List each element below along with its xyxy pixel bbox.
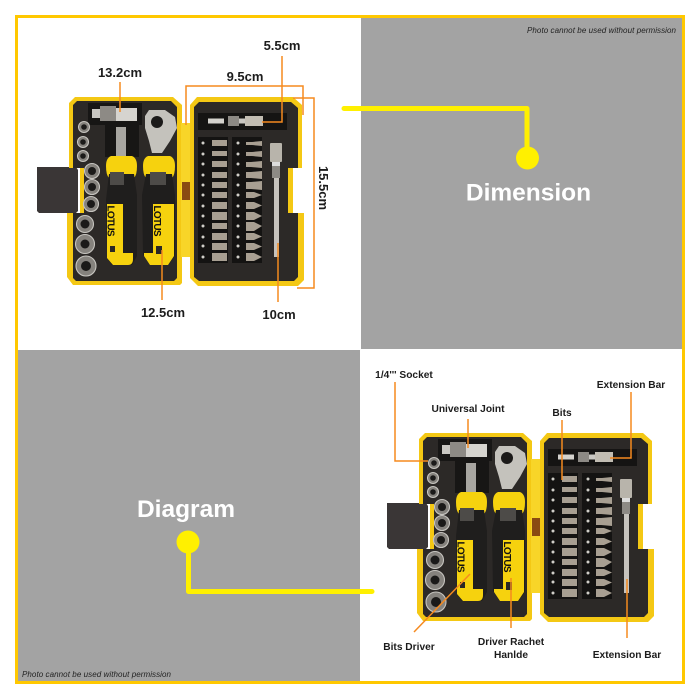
heading: Dimension: Dimension xyxy=(466,180,591,206)
panel: diagram grey background xyxy=(18,350,360,681)
leader 13.2cm xyxy=(119,82,121,112)
label handle line two: Hanlde xyxy=(494,650,528,661)
leader extension bar top xyxy=(610,392,631,458)
leader socket xyxy=(395,382,428,461)
right case xyxy=(190,97,304,286)
bits right column xyxy=(246,141,262,261)
leader extension bar bottom xyxy=(626,579,628,638)
extension bar vertical xyxy=(270,143,282,257)
left case interior xyxy=(73,101,177,281)
label bits: Bits xyxy=(552,408,572,419)
tool kit photo: dimension view xyxy=(37,97,304,286)
label 13.2cm: 13.2cm xyxy=(98,65,142,80)
hinge xyxy=(181,123,190,257)
label 15.5cm: 15.5cm xyxy=(316,166,331,210)
brand on ratchet handle, diagram: LOTUS xyxy=(501,542,512,573)
bracket 15.5cm xyxy=(293,98,314,288)
universal joint xyxy=(92,106,137,121)
brand on ratchet handle: LOTUS xyxy=(151,206,162,237)
leader bits xyxy=(561,420,563,480)
photo notice top: Photo cannot be used without permission xyxy=(527,26,677,35)
brand on driver handle: LOTUS xyxy=(104,206,116,237)
right case interior xyxy=(194,102,298,281)
leader driver ratchet handle xyxy=(510,578,512,628)
dimension annotations xyxy=(98,38,331,322)
leader 5.5cm xyxy=(262,56,282,122)
left case xyxy=(67,97,182,285)
label extension bar top: Extension Bar xyxy=(597,380,665,391)
leader 12.5cm xyxy=(161,250,163,300)
extension bar horizontal xyxy=(208,116,263,126)
diagram annotations xyxy=(375,370,665,661)
label 12.5cm: 12.5cm xyxy=(141,305,185,320)
bracket 9.5cm xyxy=(186,86,303,125)
photo notice bottom: Photo cannot be used without permission xyxy=(22,670,172,679)
dark recess xyxy=(105,125,139,157)
ratchet handle xyxy=(142,110,177,265)
leader universal joint xyxy=(467,419,469,448)
bits left column xyxy=(212,140,227,261)
label bits driver: Bits Driver xyxy=(383,642,435,653)
label driver ratchet handle: Driver Rachet xyxy=(478,637,545,648)
label 10cm: 10cm xyxy=(262,307,296,322)
flap xyxy=(37,167,78,213)
label 5.5cm: 5.5cm xyxy=(264,38,300,53)
top tray xyxy=(198,113,287,130)
label universal joint: Universal Joint xyxy=(431,404,505,415)
label socket: 1/4''' Socket xyxy=(375,370,433,381)
bits driver handle xyxy=(106,127,137,265)
bit holes xyxy=(202,142,240,258)
tool kit photo: diagram view xyxy=(387,433,654,622)
bit panels xyxy=(198,137,228,263)
brand on driver handle, diagram: LOTUS xyxy=(454,542,466,573)
leader 10cm xyxy=(277,243,279,302)
connector: diagram xyxy=(176,530,372,592)
panel: dimension grey background xyxy=(361,18,682,349)
label 9.5cm: 9.5cm xyxy=(227,69,263,84)
connector: dimension xyxy=(344,108,539,170)
label extension bar bottom: Extension Bar xyxy=(593,650,661,661)
sockets xyxy=(76,122,100,276)
heading: Diagram: Diagram xyxy=(137,496,235,523)
leader bits driver xyxy=(414,574,470,632)
